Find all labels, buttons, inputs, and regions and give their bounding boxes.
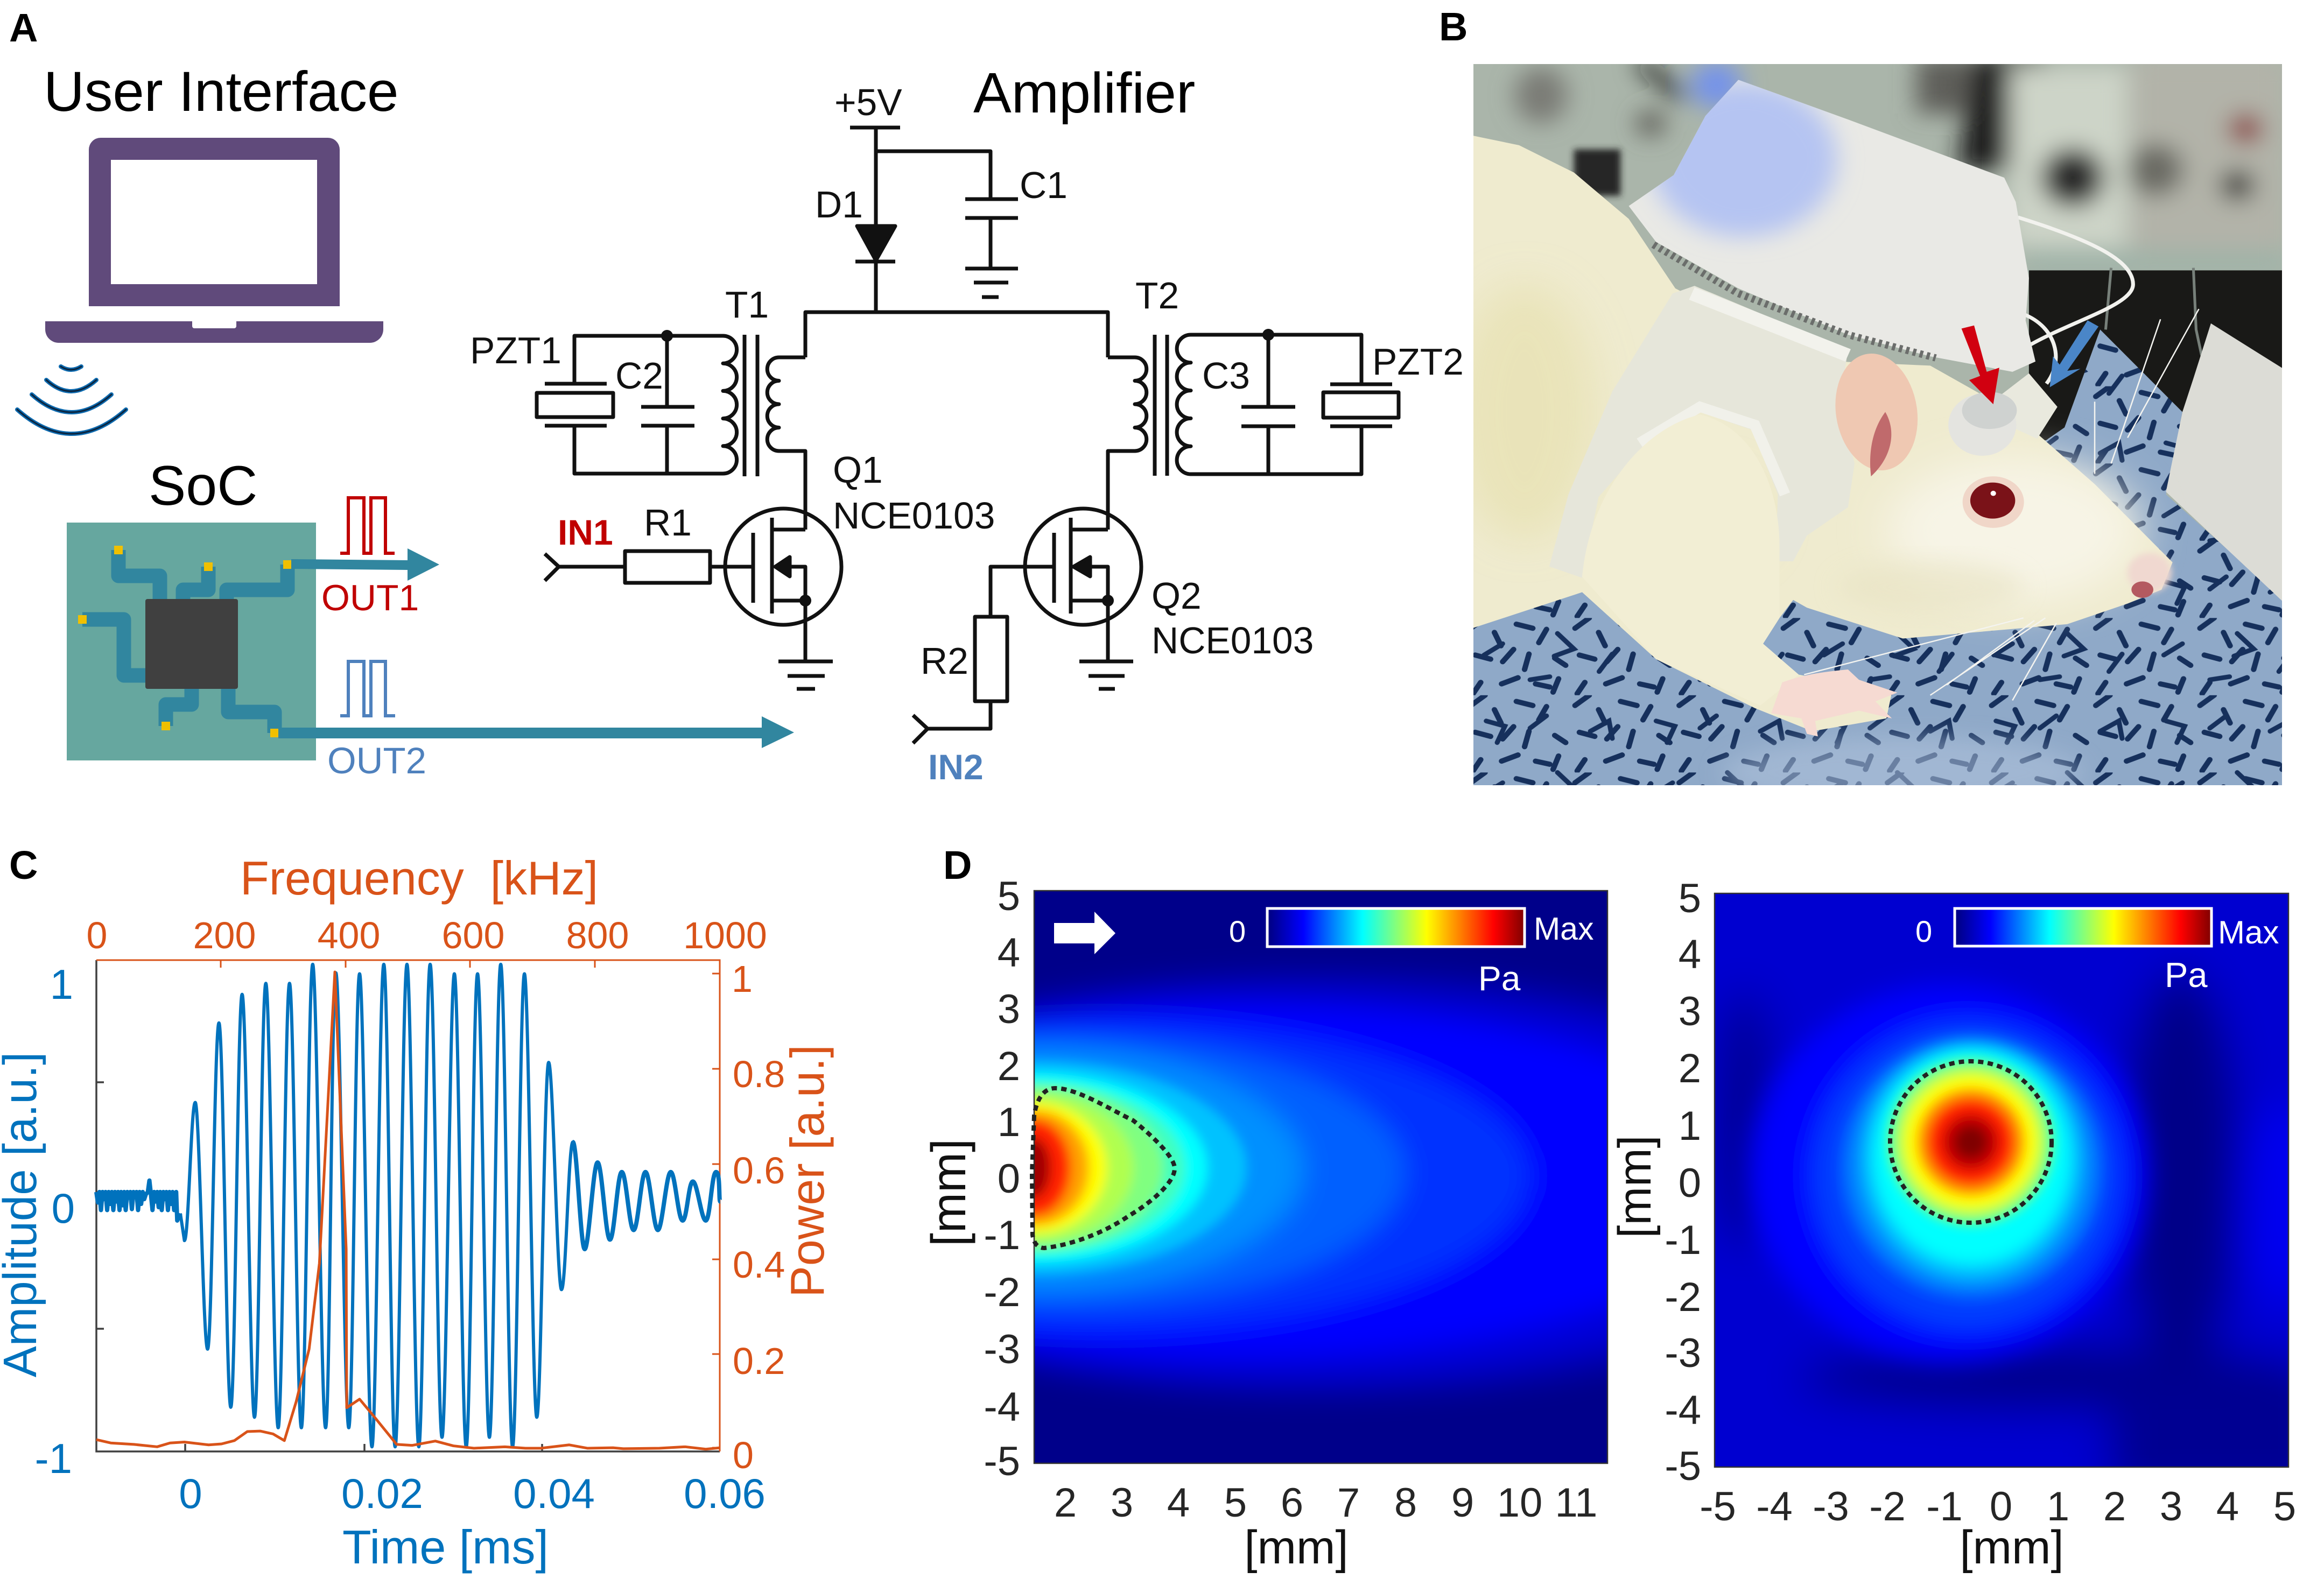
x axis labels — [1054, 1480, 1597, 1526]
x axis labels: -5 — [1700, 1484, 1736, 1529]
nose — [2128, 553, 2172, 598]
component labels: T1 — [725, 284, 769, 326]
x axis title: [mm] — [1960, 1521, 2064, 1574]
colour bar — [1267, 908, 1525, 947]
panel C: waveform and spectrum chart — [0, 843, 834, 1574]
y axis title: [mm] — [922, 1139, 976, 1246]
icon: laptop — [45, 138, 383, 343]
left axis labels: 1 — [50, 961, 73, 1008]
y axis labels: -4 — [1665, 1387, 1701, 1433]
bottom axis labels: 0.04 — [513, 1470, 595, 1517]
eye — [1963, 476, 2024, 528]
right axis labels — [732, 958, 785, 1476]
circuit diagram — [470, 81, 1464, 787]
blue LED glow — [1651, 82, 1837, 237]
colour bar labels: Pa — [1478, 959, 1521, 998]
component labels: T2 — [1135, 274, 1179, 316]
y axis labels: 0 — [1679, 1160, 1701, 1206]
colour bar labels: Max — [1534, 911, 1593, 947]
x axis labels: 2 — [1054, 1480, 1077, 1526]
x axis labels: 1 — [2047, 1484, 2069, 1529]
rat body — [1464, 134, 2173, 731]
x axis labels: 3 — [2160, 1484, 2182, 1529]
x axis labels: -2 — [1869, 1484, 1906, 1529]
colour bar labels — [1915, 914, 2279, 995]
orange power spectrum — [96, 972, 720, 1449]
dotted -3 dB contour — [1890, 1061, 2052, 1223]
SoC board with chip — [67, 523, 316, 760]
x axis labels: 7 — [1337, 1480, 1360, 1526]
right axis labels: 0 — [733, 1434, 754, 1476]
top axis labels: 0 — [87, 914, 107, 956]
component labels: PZT2 — [1372, 341, 1464, 383]
component labels: Q2 — [1152, 575, 1202, 617]
label: IN1: IN1 — [558, 512, 613, 552]
panel letter B: B — [1439, 4, 1468, 49]
y axis title: [mm] — [1609, 1135, 1661, 1238]
bottom axis labels: 0.02 — [341, 1470, 423, 1517]
y axis labels: -5 — [1665, 1443, 1701, 1489]
supply rail and D1 diode — [805, 128, 1108, 357]
whiskers — [1804, 309, 2199, 700]
component labels — [470, 81, 1464, 682]
y axis labels: 2 — [1679, 1046, 1701, 1091]
y axis labels: 4 — [998, 930, 1020, 976]
top axis labels: 200 — [193, 914, 256, 956]
right axis labels: 0.2 — [733, 1340, 785, 1382]
y axis labels: -2 — [1665, 1274, 1701, 1320]
x axis labels: 3 — [1111, 1480, 1133, 1526]
x axis labels: 5 — [2273, 1484, 2296, 1529]
transistor Q1 and R1 input — [545, 509, 841, 689]
top axis labels: 600 — [442, 914, 504, 956]
dotted -3 dB contour — [1032, 1088, 1175, 1248]
paw — [1771, 669, 1897, 736]
y axis labels: 4 — [1679, 932, 1701, 977]
y axis labels: 5 — [1679, 876, 1701, 921]
ultrasound device caps — [1948, 373, 2058, 456]
side tape — [2166, 323, 2286, 605]
fur shading — [1454, 283, 2139, 613]
pulse train: OUT2 — [340, 661, 395, 716]
right axis labels: 0.4 — [733, 1244, 785, 1286]
y axis labels — [984, 873, 1020, 1484]
icon: white arrow — [1054, 912, 1115, 954]
component labels: C3 — [1202, 355, 1250, 397]
right axis labels: 1 — [732, 958, 753, 1000]
y axis labels: -5 — [984, 1439, 1020, 1484]
top axis labels: 1000 — [683, 914, 767, 956]
wires — [1993, 217, 2133, 384]
transformer T2 and PZT2 — [1108, 329, 1399, 530]
left axis labels: -1 — [35, 1435, 72, 1482]
component labels: C1 — [1020, 164, 1068, 206]
blue arrow — [2050, 320, 2098, 387]
colour bar labels: 0 — [1915, 914, 1932, 948]
heading: User Interface: User Interface — [44, 60, 398, 123]
foreleg — [1582, 414, 1799, 706]
illustrated photograph — [1454, 52, 2298, 808]
y axis labels: -2 — [984, 1270, 1020, 1315]
field colours — [678, 807, 1911, 1550]
bottom axis labels: 0 — [179, 1470, 202, 1517]
red arrow — [1962, 326, 1999, 404]
x axis labels: 8 — [1394, 1480, 1417, 1526]
icon: wireless signal — [17, 366, 126, 434]
top axis labels: 400 — [318, 914, 380, 956]
x axis labels: -1 — [1926, 1484, 1963, 1529]
ear — [1828, 349, 1926, 476]
y axis labels: -1 — [984, 1213, 1020, 1258]
background lab equipment — [1473, 64, 2282, 550]
y axis labels: -4 — [984, 1384, 1020, 1430]
y axis labels: 1 — [998, 1099, 1020, 1145]
bottom axis labels — [179, 1470, 766, 1517]
component labels: +5V — [834, 81, 902, 123]
top axis labels — [87, 914, 767, 956]
right axis labels: 0.6 — [733, 1150, 785, 1192]
plot frame and ticks — [96, 960, 720, 1451]
panel letter A: A — [9, 5, 38, 50]
x axis labels: 5 — [1224, 1480, 1247, 1526]
y axis labels: -3 — [984, 1327, 1020, 1372]
bottom axis title: Time [ms] — [342, 1520, 549, 1574]
panel letter C: C — [9, 843, 38, 887]
white mesh vest — [1549, 286, 1855, 578]
colour bar labels: Pa — [2165, 955, 2208, 995]
x axis title: [mm] — [1244, 1521, 1349, 1574]
blue time-domain waveform — [96, 964, 720, 1447]
x axis labels: 4 — [1167, 1480, 1190, 1526]
field colours — [1626, 807, 2324, 1561]
y axis labels: 2 — [998, 1044, 1020, 1089]
component labels: PZT1 — [470, 329, 561, 371]
panel B: photo of rat wearing device — [1439, 4, 2298, 808]
x axis labels — [1700, 1484, 2296, 1529]
right axis title: Power [a.u.] — [781, 1045, 834, 1298]
x axis labels: 6 — [1281, 1480, 1303, 1526]
x axis labels: 11 — [1555, 1480, 1597, 1526]
y axis labels — [1665, 876, 1701, 1489]
white pouch — [1628, 80, 2035, 372]
top axis title: Frequency [kHz] — [240, 851, 598, 905]
y axis labels: 1 — [1679, 1103, 1701, 1149]
colour bar labels: Max — [2218, 914, 2279, 950]
pulse train: OUT1 — [340, 498, 395, 553]
panel letter D: D — [943, 843, 972, 887]
colour bar labels — [1229, 911, 1593, 998]
stitched edge — [1653, 245, 1936, 358]
colour bar labels: 0 — [1229, 914, 1246, 948]
label: IN2: IN2 — [928, 747, 984, 787]
blue patterned drape — [1464, 329, 2286, 808]
x axis labels: 10 — [1497, 1480, 1542, 1526]
y axis labels: -3 — [1665, 1330, 1701, 1376]
heatmap: longitudinal plane — [678, 807, 1911, 1574]
component labels: Q1 — [833, 449, 883, 491]
x axis labels: 2 — [2103, 1484, 2126, 1529]
bottom axis labels: 0.06 — [684, 1470, 766, 1517]
component labels: NCE0103 — [833, 495, 995, 537]
arrow: OUT2 signal — [278, 716, 794, 748]
heading: SoC: SoC — [149, 455, 257, 517]
x axis labels: 0 — [1990, 1484, 2012, 1529]
x axis labels: -3 — [1813, 1484, 1849, 1529]
y axis labels: -1 — [1665, 1217, 1701, 1263]
frame — [1034, 891, 1607, 1463]
left axis labels — [35, 961, 75, 1482]
y axis labels: 5 — [998, 873, 1020, 919]
component labels: C2 — [615, 355, 663, 397]
arrow: OUT1 signal — [291, 548, 439, 581]
transistor Q2 and R2 input — [913, 509, 1141, 743]
y axis labels: 3 — [1679, 989, 1701, 1034]
y axis labels: 3 — [998, 986, 1020, 1032]
right axis labels: 0.8 — [733, 1053, 785, 1095]
panel A: system schematic — [9, 5, 1464, 787]
component labels: NCE0103 — [1152, 619, 1314, 661]
component labels: D1 — [815, 184, 863, 225]
label: OUT2: OUT2 — [327, 740, 426, 781]
y axis labels: 0 — [998, 1156, 1020, 1202]
panel D: acoustic pressure maps — [678, 807, 2324, 1574]
x axis labels: 9 — [1451, 1480, 1474, 1526]
colour bar — [1955, 908, 2211, 946]
component labels: R2 — [921, 640, 968, 682]
transformer T1 and PZT1 — [537, 330, 805, 530]
frame — [1715, 893, 2288, 1467]
label: OUT1: OUT1 — [321, 577, 419, 618]
top axis labels: 800 — [566, 914, 629, 956]
left axis labels: 0 — [52, 1185, 75, 1232]
x axis labels: -4 — [1756, 1484, 1793, 1529]
component labels: R1 — [644, 502, 692, 544]
heading: Amplifier: Amplifier — [973, 61, 1195, 125]
heatmap: transverse plane — [1609, 807, 2324, 1574]
x axis labels: 4 — [2216, 1484, 2239, 1529]
